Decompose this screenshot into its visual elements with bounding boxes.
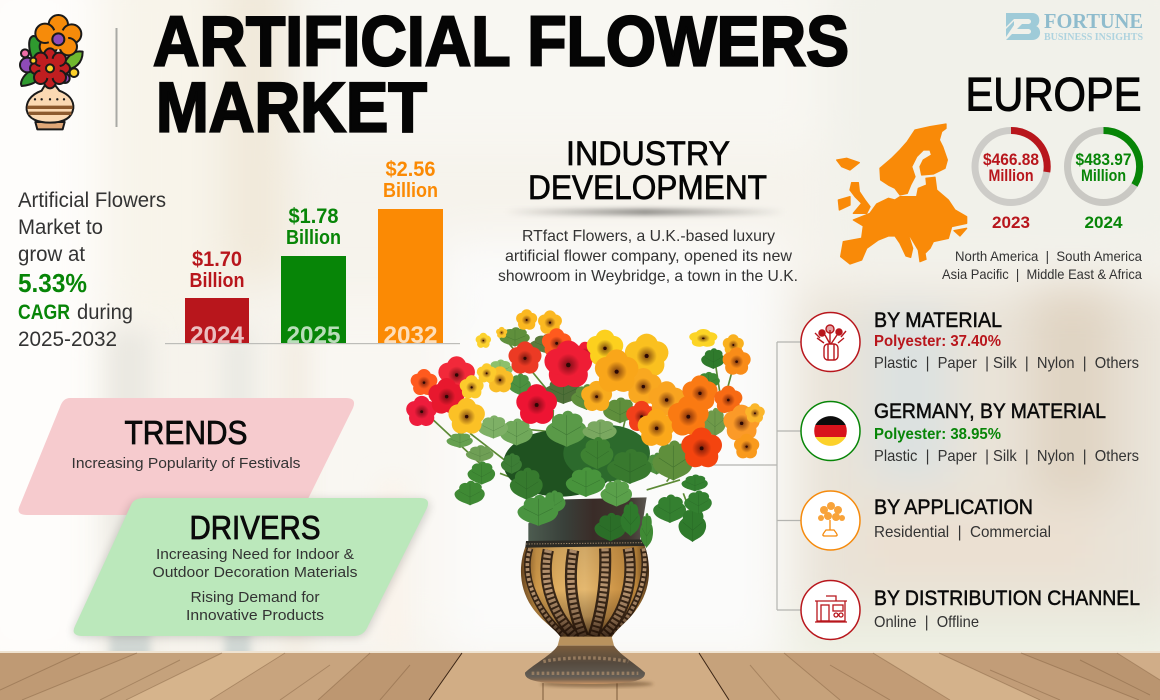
donut: Europe 2024: 2024 xyxy=(1084,213,1123,232)
panel: drivers: Innovative Products xyxy=(186,607,324,624)
bar 2032 xyxy=(378,158,443,349)
industry development text xyxy=(498,228,798,285)
other regions list: North America | South America xyxy=(955,248,1142,264)
CAGR text block: during xyxy=(77,301,133,324)
bar 2025: Billion xyxy=(286,227,341,249)
icon: by application xyxy=(801,491,860,550)
CAGR text block: 2025-2032 xyxy=(18,328,117,351)
segment: by distribution channel xyxy=(874,587,1140,631)
donut: Europe 2023: $466.88 xyxy=(983,150,1039,169)
segment: by distribution channel: BY DISTRIBUTION CHANNEL xyxy=(874,587,1140,610)
industry development text: RTfact Flowers, a U.K.-based luxury xyxy=(522,228,775,245)
bar 2024 xyxy=(185,248,249,349)
map: Europe xyxy=(837,124,967,264)
bar 2024: Billion xyxy=(190,270,244,292)
donut: Europe 2024 xyxy=(1068,130,1140,232)
CAGR text block: grow at xyxy=(18,243,85,266)
segment: by application xyxy=(874,496,1051,541)
wooden table xyxy=(0,651,1160,700)
bar 2025 xyxy=(281,205,346,349)
segment: Germany by material: Plastic | Paper | Silk | Nylon | Others xyxy=(874,448,1139,465)
panel: drivers: DRIVERS xyxy=(190,509,320,546)
panel: trends: Increasing Popularity of Festivals xyxy=(72,455,300,472)
industry development text: showroom in Weybridge, a town in the U.K. xyxy=(498,268,798,285)
CAGR text block xyxy=(18,189,166,351)
panel: drivers: Increasing Need for Indoor & xyxy=(156,546,354,563)
segment: Germany by material: GERMANY, BY MATERIAL xyxy=(874,400,1106,423)
panel: trends xyxy=(19,398,354,515)
CAGR text block: Market to xyxy=(18,216,103,239)
donut: Europe 2024: Million xyxy=(1081,166,1126,185)
CAGR text block: CAGR xyxy=(18,301,70,324)
heading: Industry Development: DEVELOPMENT xyxy=(528,169,767,207)
bar 2025: 2025 xyxy=(286,322,340,349)
logo: Fortune Business Insights: BUSINESS INSIGHTS xyxy=(1044,32,1143,43)
segment: by material: BY MATERIAL xyxy=(874,309,1002,332)
segment connector lines xyxy=(710,342,801,610)
donut: Europe 2024: $483.97 xyxy=(1076,150,1132,169)
icon: flower pot logo xyxy=(20,15,83,129)
icon: by distribution channel xyxy=(801,580,860,640)
title: ARTIFICIAL FLOWERS xyxy=(153,2,849,80)
CAGR text block: Artificial Flowers xyxy=(18,189,166,212)
title xyxy=(153,2,849,146)
other regions list: Asia Pacific | Middle East & Africa xyxy=(942,266,1142,282)
panel: drivers xyxy=(74,498,429,637)
heading: Industry Development: INDUSTRY xyxy=(566,135,730,173)
other regions list xyxy=(942,248,1142,282)
stems xyxy=(433,337,733,520)
heading: Industry Development xyxy=(528,135,767,207)
segment: by material: Polyester: 37.40% xyxy=(874,333,1001,350)
bar 2032: $2.56 xyxy=(386,158,436,181)
segment: Germany by material: Polyester: 38.95% xyxy=(874,426,1001,443)
industry development text: artificial flower company, opened its new xyxy=(505,248,792,265)
panel: drivers: Outdoor Decoration Materials xyxy=(152,564,358,581)
bar 2024: 2024 xyxy=(190,322,245,349)
photo: bronze vase with flowers xyxy=(404,309,766,687)
logo: Fortune Business Insights: FORTUNE xyxy=(1044,9,1143,33)
CAGR text block: 5.33% xyxy=(18,268,87,298)
bar 2024: $1.70 xyxy=(192,248,242,271)
donut: Europe 2023: Million xyxy=(988,166,1034,185)
donut: Europe 2023: 2023 xyxy=(992,213,1030,232)
bar 2032: 2032 xyxy=(384,322,438,349)
donut: Europe 2023 xyxy=(975,130,1047,232)
icon: by material xyxy=(801,312,860,372)
flowers xyxy=(404,309,766,472)
segment: by material xyxy=(874,309,1139,372)
leaves xyxy=(447,327,726,548)
bar 2025: $1.78 xyxy=(288,205,339,228)
logo: Fortune Business Insights xyxy=(1006,9,1143,43)
vase xyxy=(521,497,653,687)
segment: Germany by material xyxy=(874,400,1139,465)
segment: by distribution channel: Online | Offline xyxy=(874,614,979,631)
segment: by application: Residential | Commercial xyxy=(874,524,1051,541)
segment: by application: BY APPLICATION xyxy=(874,496,1033,519)
header divider xyxy=(116,28,118,127)
title: MARKET xyxy=(156,68,427,146)
bar 2032: Billion xyxy=(383,180,438,202)
panel: trends: TRENDS xyxy=(124,414,248,451)
segment: by material: Plastic | Paper | Silk | Nylon | Others xyxy=(874,355,1139,372)
panel: drivers: Rising Demand for xyxy=(190,589,320,606)
bar chart: market size xyxy=(165,158,460,349)
icon: Germany flag xyxy=(801,402,860,460)
